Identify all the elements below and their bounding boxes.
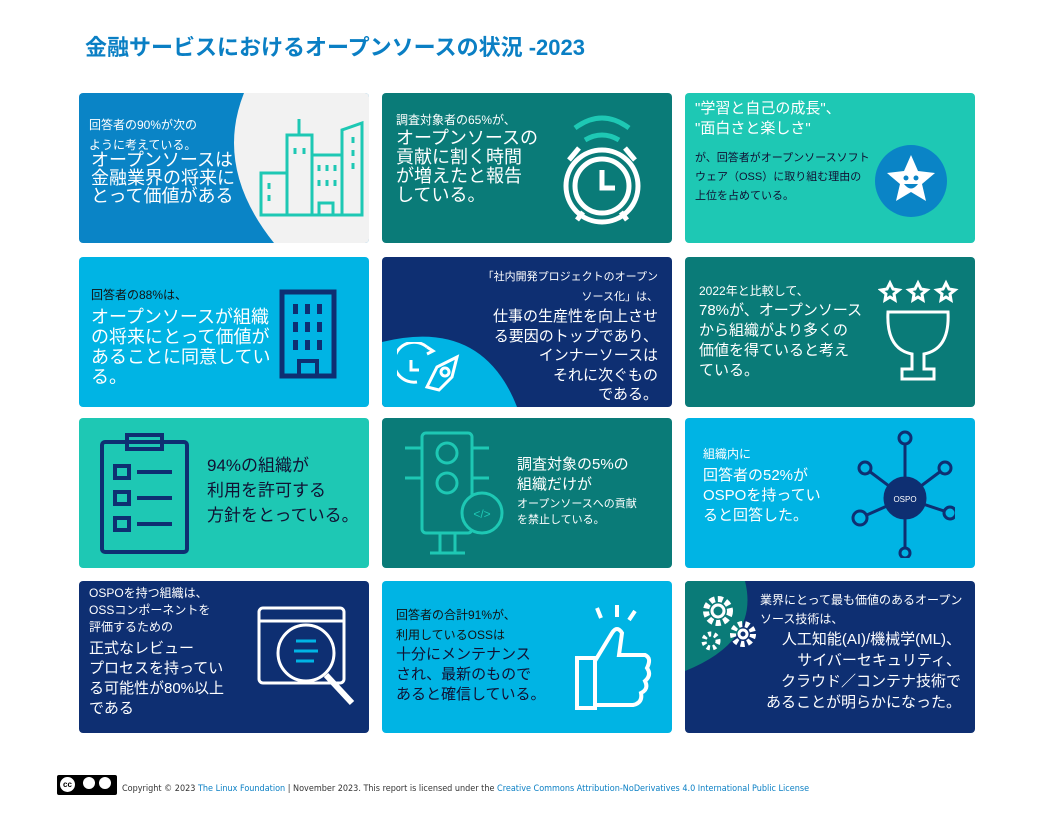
panel: 78%: ている。: [699, 362, 759, 379]
panel: learning and fun: 上位を占めている。: [695, 190, 794, 202]
panel: innersource: ソース化」は、: [582, 291, 658, 303]
panel: 5% prohibit: [382, 418, 672, 568]
panel: 52% OSPO: ると回答した。: [703, 507, 808, 524]
panel: OSPO review 80%: である: [89, 700, 134, 717]
panel: AI ML security cloud: サイバーセキュリティ、: [797, 652, 961, 669]
panel: 65% time: が増えたと報告: [396, 166, 522, 186]
icon: cc badge: cc: [63, 780, 72, 789]
panel: 5% prohibit: オープンソースへの貢献: [517, 498, 637, 510]
panel: 5% prohibit: 組織だけが: [517, 476, 592, 493]
panel: 90% future value: 回答者の90%が次の: [89, 118, 197, 132]
panel: OSPO review 80%: OSPOを持つ組織は、: [89, 586, 208, 600]
panel: 65% time: [382, 93, 672, 243]
panel: innersource: である。: [598, 386, 658, 403]
panel: 88%: の将来にとって価値が: [91, 327, 270, 347]
panel: 94% policy: [79, 418, 369, 568]
panel: 78%: 78%が、オープンソース: [699, 302, 862, 319]
panel: 88%: る。: [91, 367, 127, 387]
panel: AI ML security cloud: クラウド／コンテナ技術で: [781, 673, 961, 690]
panel: 5% prohibit: 調査対象の5%の: [517, 456, 629, 473]
panel: OSPO review 80%: OSSコンポーネントを: [89, 603, 210, 617]
panel: 78%: から組織がより多くの: [699, 322, 848, 339]
panel: 52% OSPO: OSPOを持ってい: [703, 487, 821, 504]
icon: traffic light: [405, 432, 504, 554]
panel: 90% future value: 金融業界の将来に: [91, 168, 235, 188]
panel: AI ML security cloud: [685, 581, 975, 733]
panel: 88%: あることに同意してい: [91, 347, 270, 367]
panel: 88%: [79, 257, 369, 407]
panel: 90% future value: ように考えている。: [89, 138, 196, 152]
panel: learning and fun: ウェア（OSS）に取り組む理由の: [695, 171, 861, 183]
icon: trophy stars: [878, 280, 958, 380]
panel: OSPO review 80%: る可能性が80%以上: [89, 680, 224, 697]
panel: learning and fun: [685, 93, 975, 243]
panel: 94% policy: 利用を許可する: [207, 481, 326, 500]
panel: AI ML security cloud: 業界にとって最も価値のあるオープン: [760, 593, 962, 607]
panel: innersource: 仕事の生産性を向上させ: [493, 308, 658, 325]
panel: learning and fun: "学習と自己の成長"、: [695, 100, 841, 117]
panel: 94% policy: 方針をとっている。: [207, 506, 359, 525]
panel: 65% time: 調査対象者の65%が、: [396, 113, 516, 127]
icon: cc badge: [57, 775, 117, 795]
panel: 78%: 2022年と比較して、: [699, 284, 809, 298]
panel: 52% OSPO: 回答者の52%が: [703, 467, 808, 484]
panel: innersource: インナーソースは: [539, 347, 658, 364]
icon: network hub: [852, 430, 955, 558]
panel: OSPO review 80%: [79, 581, 369, 733]
icon: rocket clock: [397, 342, 460, 392]
panel: AI ML security cloud: あることが明らかになった。: [766, 694, 961, 711]
panel: 65% time: 貢献に割く時間: [396, 147, 522, 167]
panel: innersource: それに次ぐもの: [553, 366, 658, 384]
panel: 65% time: している。: [396, 185, 485, 205]
panel: 91% maintained: あると確信している。: [396, 686, 546, 703]
panel: 94% policy: 94%の組織が: [207, 456, 309, 475]
panel: 78%: [685, 257, 975, 407]
panel: OSPO review 80%: 評価するための: [89, 620, 173, 634]
panel: 90% future value: [79, 93, 369, 243]
panel: 52% OSPO: [685, 418, 975, 568]
icon: thumbs up: [575, 605, 652, 710]
panel: 78%: 価値を得ていると考え: [699, 342, 849, 359]
icon: clipboard: [100, 433, 189, 554]
panel: OSPO review 80%: 正式なレビュー: [89, 640, 194, 657]
panel: 91% maintained: 利用しているOSSは: [396, 628, 505, 642]
icon: alarm clock: [564, 116, 640, 224]
panel: 90% future value: オープンソースは: [91, 150, 233, 170]
panel: 91% maintained: され、最新のもので: [396, 666, 531, 683]
panel: innersource: [382, 257, 672, 407]
icon: buildings: [260, 119, 364, 216]
panel: 91% maintained: 回答者の合計91%が、: [396, 608, 516, 622]
panel: innersource: る要因のトップであり、: [494, 328, 658, 344]
icon: gears: [702, 596, 756, 650]
title: 金融サービスにおけるオープンソースの状況 -2023: [85, 35, 585, 60]
panel: learning and fun: が、回答者がオープンソースソフト: [695, 152, 870, 164]
icon: traffic light: </>: [473, 507, 491, 521]
icon: office building: [280, 290, 336, 378]
panel: AI ML security cloud: 人工知能(AI)/機械学(ML)、: [782, 631, 961, 648]
icon: magnifier window: [258, 606, 354, 705]
panel: 65% time: オープンソースの: [396, 128, 538, 148]
panel: learning and fun: "面白さと楽しさ": [695, 120, 811, 137]
icon: network hub: OSPO: [893, 495, 917, 504]
panel: 91% maintained: [382, 581, 672, 733]
panel: OSPO review 80%: プロセスを持ってい: [89, 660, 223, 677]
icon: star face: [875, 145, 947, 217]
panel: 52% OSPO: 組織内に: [703, 447, 751, 461]
panel: 88%: オープンソースが組織: [91, 307, 269, 327]
panel: 5% prohibit: を禁止している。: [517, 514, 605, 526]
footer: license: Copyright © 2023 The Linux Foundation | November 2023. This report is licensed under the Creative Commons Attribution-NoDerivatives 4.0 International Public License: [122, 784, 809, 794]
panel: AI ML security cloud: ソース技術は、: [760, 612, 843, 626]
panel: 90% future value: とって価値がある: [91, 186, 234, 206]
footer: license: [57, 775, 809, 795]
panel: innersource: 「社内開発プロジェクトのオープン: [483, 271, 658, 283]
panel: 88%: 回答者の88%は、: [91, 288, 187, 302]
panel: 91% maintained: 十分にメンテナンス: [396, 646, 531, 663]
